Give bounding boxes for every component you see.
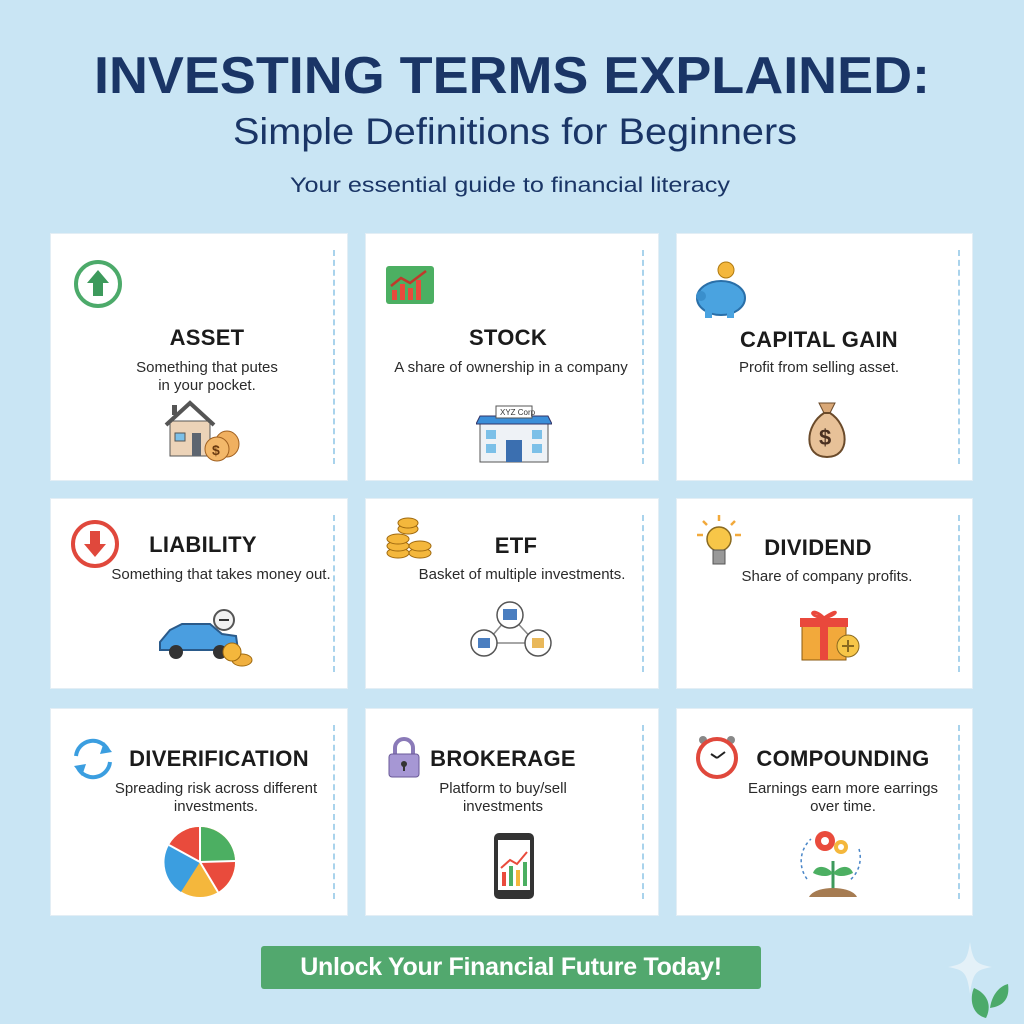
panel: asset: [50, 233, 348, 481]
icon: building: [476, 406, 552, 462]
title: stock: STOCK: [469, 325, 547, 350]
icon: down arrow: [71, 520, 119, 568]
header: [94, 47, 930, 197]
icon: car with coins: [159, 609, 252, 666]
text: brokerage definition: [439, 780, 567, 815]
text: brokerage definition: Platform to buy/sell: [439, 780, 567, 797]
panel: brokerage: [365, 708, 659, 916]
icon: coin stack: [386, 518, 432, 558]
panel: compounding: [676, 708, 973, 916]
title: INVESTING TERMS EXPLAINED:: [94, 47, 930, 105]
icon: chart: [386, 266, 434, 304]
icon: light bulb: [697, 515, 741, 564]
icon: house and money bags: $: [212, 442, 220, 458]
icon: building: XYZ Corp: [500, 408, 536, 417]
text: diversification definition: investments.: [174, 798, 258, 815]
text: stock definition: A share of ownership in a company: [394, 359, 628, 376]
panel: liability: [50, 498, 348, 689]
title: compounding: COMPOUNDING: [756, 746, 930, 771]
icon: padlock: [388, 737, 420, 778]
icon: gift: [800, 610, 860, 660]
text: asset definition: in your pocket.: [158, 377, 256, 394]
title: asset: ASSET: [170, 325, 244, 350]
text: compounding definition: [748, 780, 938, 815]
panel: capital gain: [676, 233, 973, 481]
tagline: Your essential guide to financial literacy: [290, 174, 731, 197]
icon: up arrow: [74, 260, 122, 308]
panel: dividend: [676, 498, 973, 689]
icon: pie chart: [164, 827, 235, 897]
title: etf: ETF: [495, 533, 537, 558]
icon: piggy bank: [696, 262, 746, 318]
title: capital gain: CAPITAL GAIN: [740, 327, 898, 352]
panel: stock: [365, 233, 659, 481]
text: dividend definition: Share of company profits.: [742, 568, 912, 585]
text: capital gain definition: Profit from selling asset.: [739, 359, 899, 376]
text: diversification definition: [115, 780, 318, 815]
text: asset definition: Something that putes: [136, 359, 278, 376]
button: call to action: [261, 946, 761, 989]
icon: money bag: [808, 402, 846, 458]
text: brokerage definition: investments: [463, 798, 543, 815]
title: dividend: DIVIDEND: [764, 535, 872, 560]
panel: etf: [365, 498, 659, 689]
icon: network: [470, 601, 552, 657]
icon: money bag: $: [819, 425, 831, 450]
text: compounding definition: Earnings earn more earrings: [748, 780, 938, 797]
button: call to action: Unlock Your Financial Future Today!: [300, 953, 722, 981]
icon: sparkle and leaves: [949, 943, 1008, 1018]
panel: diversification: [50, 708, 348, 916]
text: etf definition: Basket of multiple investments.: [419, 566, 625, 583]
title: brokerage: BROKERAGE: [430, 746, 576, 771]
text: asset definition: [136, 359, 278, 394]
icon: house and money bags: [164, 400, 240, 462]
title: diversification: DIVERIFICATION: [129, 746, 309, 771]
text: compounding definition: over time.: [810, 798, 876, 815]
subtitle: Simple Definitions for Beginners: [233, 111, 797, 152]
icon: plant with gears: [800, 831, 861, 897]
text: liability definition: Something that takes money out.: [111, 566, 331, 583]
icon: clock: [696, 736, 738, 779]
title: liability: LIABILITY: [149, 532, 257, 557]
text: diversification definition: Spreading risk across different: [115, 780, 317, 797]
icon: cycle arrows: [74, 738, 112, 780]
icon: phone chart: [494, 833, 534, 899]
